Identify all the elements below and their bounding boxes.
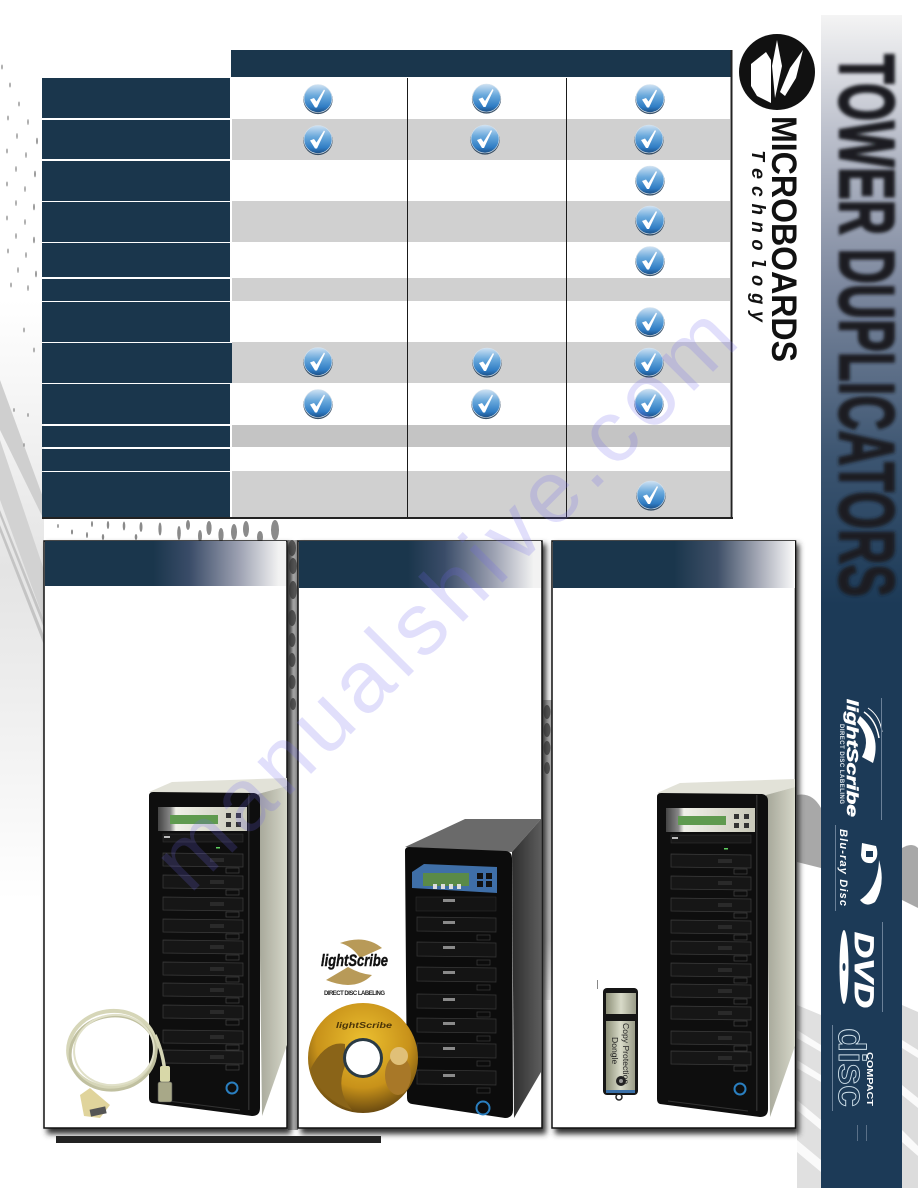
- lightscribe logo: DIRECT DISC LABELING: [324, 991, 385, 997]
- row labels column: [42, 78, 232, 517]
- watermark: manualshive.com: [133, 287, 755, 908]
- tagline: Technology: [746, 150, 768, 324]
- sidebar logo: lightscribe: [838, 698, 882, 820]
- card header: [553, 541, 795, 588]
- table header bar: [231, 50, 732, 77]
- copy protection dongle: Dongle: [610, 1037, 620, 1064]
- logo: microboards technology: [739, 34, 815, 362]
- comparison table: [42, 50, 733, 519]
- lightscribe disc: [308, 1003, 418, 1113]
- product card 1: [44, 541, 291, 1134]
- sidebar logo: dvd: [840, 922, 883, 1012]
- card header: [45, 541, 286, 586]
- copy protection dongle: Copy Protection: [621, 1023, 631, 1084]
- serial cable: [63, 1005, 172, 1118]
- sidebar logo: compact disc: [830, 1025, 875, 1141]
- lightscribe logo: [321, 939, 388, 997]
- tower duplicator with ten drives: [657, 779, 795, 1117]
- sidebar logo: lightscribe: lightScribe: [843, 699, 860, 817]
- tower duplicator with eight drives: [405, 819, 541, 1118]
- table rules: [42, 50, 733, 519]
- lightscribe disc: lightScribe: [336, 1020, 392, 1030]
- sidebar logo: blu-ray disc: Blu-ray Disc: [837, 829, 849, 906]
- check marks: [303, 84, 666, 511]
- row stripes: [232, 119, 730, 517]
- sidebar: [821, 15, 902, 1188]
- sidebar logo: compact disc: COMPACT: [865, 1052, 875, 1107]
- sidebar logo: lightscribe: DIRECT DISC LABELING: [838, 724, 844, 804]
- wordmark: MICROBOARDS: [764, 116, 803, 362]
- product card 3: [552, 541, 799, 1134]
- tower duplicator with ten drives: [149, 778, 287, 1116]
- footer bar: [56, 1136, 381, 1143]
- lightscribe logo: lightScribe: [321, 951, 388, 970]
- sidebar logo: blu-ray disc: [835, 825, 882, 911]
- sidebar logo: compact disc: disc: [830, 1028, 872, 1107]
- title: tower duplicators: TOWER DUPLICATORS: [823, 54, 911, 597]
- product card 2: [298, 541, 546, 1134]
- logo emblem: [739, 34, 815, 110]
- sidebar logo: dvd: DVD: [849, 932, 879, 1008]
- card header: [299, 541, 541, 588]
- copy protection dongle: [597, 980, 638, 1100]
